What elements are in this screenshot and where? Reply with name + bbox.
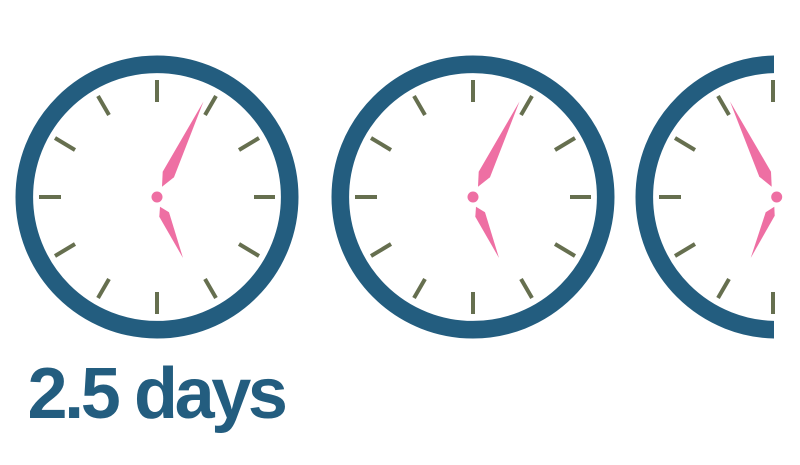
- infographic canvas: [16, 56, 782, 433]
- clock 3 (partial): [644, 64, 800, 330]
- clock 1: [24, 64, 290, 330]
- label: 2.5 days: 2.5 days: [28, 354, 286, 434]
- clock 2 hands: [468, 102, 520, 258]
- clock 2: [340, 64, 606, 330]
- clock 1 hands: [152, 102, 204, 258]
- clock 3 hands: [730, 102, 782, 258]
